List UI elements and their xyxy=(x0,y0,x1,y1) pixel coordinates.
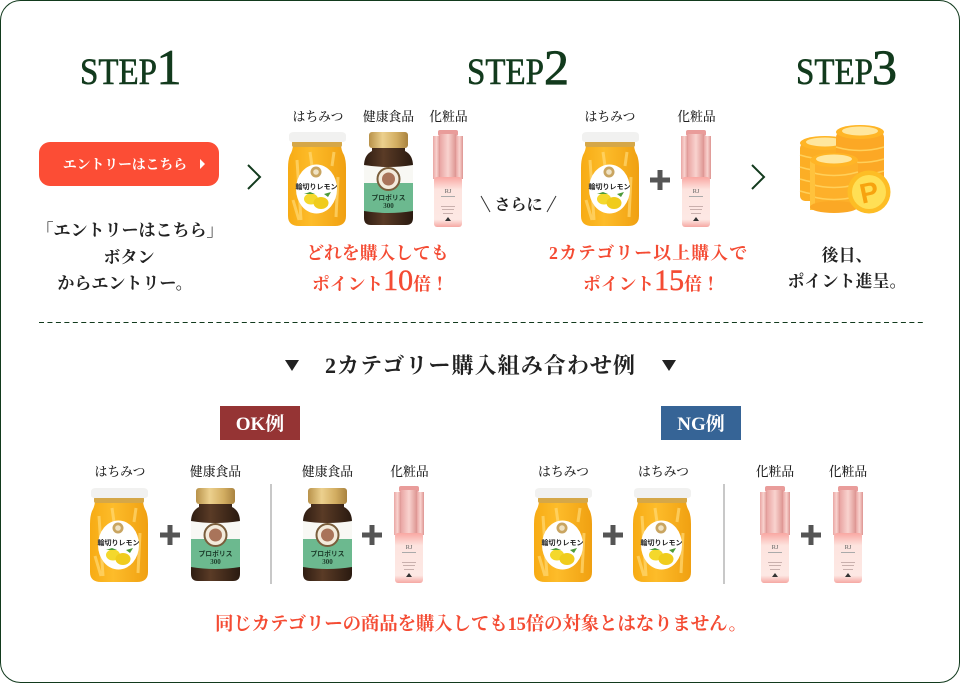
product group: step 2 two categories: 化粧品 xyxy=(677,106,716,125)
OK example 1: honey and health food xyxy=(90,461,241,582)
NG example 1: honey and honey xyxy=(534,461,691,582)
text: step 1 description: ボタン xyxy=(104,248,154,267)
NG example 2: cosmetics and cosmetics: 化粧品 xyxy=(756,461,794,480)
badge: NG xyxy=(661,406,741,440)
text: step 3 description: 後日、 xyxy=(822,246,872,265)
arrow: step 2 to step 3 xyxy=(752,165,764,189)
entry button: エントリーはこちら xyxy=(63,153,187,173)
text: step 3 description xyxy=(788,246,906,291)
heading: STEP3: STEP xyxy=(796,52,873,93)
NG example 2: cosmetics and cosmetics xyxy=(756,461,867,583)
OK example 2: health food and cosmetics: 化粧品 xyxy=(390,461,429,480)
OK example 1: honey and health food: 健康食品 xyxy=(190,461,241,480)
OK example 2: health food and cosmetics: 健康食品 xyxy=(302,461,353,480)
product group: step 2 two categories xyxy=(581,106,716,227)
dashed divider xyxy=(39,322,923,324)
product group: step 2 any category xyxy=(288,106,468,227)
heading: STEP3: 3 xyxy=(872,39,897,95)
callout: points 10x xyxy=(306,243,449,297)
text: furthermore: さらに xyxy=(494,192,543,215)
callout: points 15x: ポイント15倍！ xyxy=(583,264,720,297)
product group: step 2 two categories: はちみつ xyxy=(585,106,635,125)
icon: coin stacks xyxy=(800,125,890,214)
product group: step 2 any category: 化粧品 xyxy=(429,106,468,125)
callout: points 15x: 2カテゴリー以上購入で xyxy=(549,243,747,263)
badge: OK xyxy=(220,406,300,440)
vertical separator: OK xyxy=(270,484,272,584)
text: step 1 description xyxy=(36,221,224,293)
callout: points 10x: ポイント10倍！ xyxy=(312,264,449,297)
heading: STEP2 xyxy=(467,39,569,95)
heading: STEP1: STEP xyxy=(80,52,157,93)
icon: coin stacks: P xyxy=(857,175,881,210)
OK example 2: health food and cosmetics xyxy=(302,461,429,583)
text: step 1 description: 「エントリーはこちら」 xyxy=(36,221,224,240)
NG example 1: honey and honey: はちみつ xyxy=(638,461,689,480)
arrow: step 1 to step 2 xyxy=(248,165,260,189)
product group: step 2 any category: はちみつ xyxy=(293,106,343,125)
heading: STEP1: 1 xyxy=(156,39,182,95)
vertical separator: NG xyxy=(723,484,725,584)
callout: points 10x: どれを購入しても xyxy=(306,243,449,263)
heading: STEP1 xyxy=(80,39,182,95)
text: step 1 description: からエントリー。 xyxy=(57,274,193,293)
heading: STEP3 xyxy=(796,39,897,95)
note: same category not eligible: 同じカテゴリーの商品を購入しても15倍の対象とはなりません。 xyxy=(215,613,747,635)
NG example 2: cosmetics and cosmetics: 化粧品 xyxy=(829,461,867,480)
NG example 1: honey and honey: はちみつ xyxy=(538,461,589,480)
OK example 1: honey and health food: はちみつ xyxy=(95,461,145,480)
heading: STEP2: 2 xyxy=(544,39,569,95)
product group: step 2 any category: 健康食品 xyxy=(363,106,414,125)
text: furthermore xyxy=(481,192,556,215)
callout: points 15x xyxy=(549,243,747,297)
text: step 3 description: ポイント進呈。 xyxy=(788,272,906,291)
entry button xyxy=(39,142,219,186)
heading: STEP2: STEP xyxy=(467,52,544,93)
section heading: combination examples: 2カテゴリー購入組み合わせ例 xyxy=(325,353,635,378)
badge: OK: OK例 xyxy=(236,413,284,435)
badge: NG: NG例 xyxy=(677,413,725,435)
